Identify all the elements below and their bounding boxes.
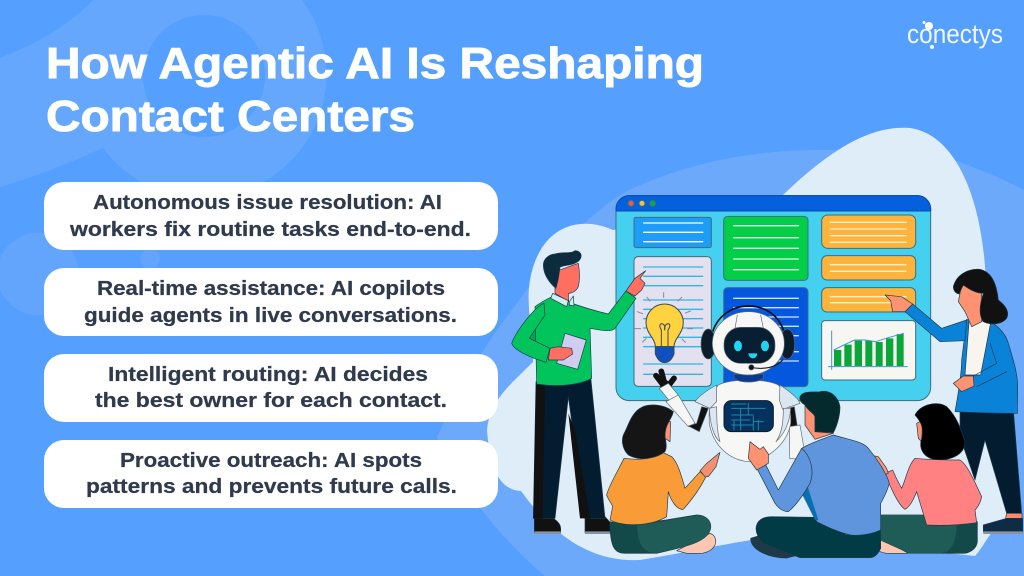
robot arms	[656, 371, 674, 386]
woman sitting in pink	[870, 404, 982, 553]
background ring and swoosh	[0, 0, 327, 315]
title: Contact Centers	[46, 92, 415, 141]
title: How Agentic AI Is Reshaping	[46, 39, 704, 88]
illustration	[512, 196, 1023, 558]
icon: light bulb	[635, 293, 693, 363]
woman standing with blue blazer	[885, 269, 1023, 534]
card: real-time assistance	[44, 268, 498, 336]
card: intelligent routing	[44, 354, 498, 422]
card: proactive outreach: Proactive outreach: AI spots	[120, 449, 422, 472]
robot body	[709, 380, 791, 462]
illustration backdrop blobs	[437, 128, 1024, 576]
card: proactive outreach	[44, 440, 498, 508]
bar chart	[828, 331, 907, 369]
card: intelligent routing: the best owner for each contact.	[95, 389, 447, 412]
card: intelligent routing: Intelligent routing: AI decides	[108, 363, 428, 386]
robot	[656, 306, 806, 462]
card: autonomous issue resolution: workers fix routine tasks end-to-end.	[69, 218, 471, 241]
card: proactive outreach: patterns and prevents future calls.	[86, 475, 457, 498]
dashboard window	[616, 196, 931, 401]
man standing with tablet	[512, 251, 646, 534]
logo: conectys: conectys	[907, 19, 1003, 49]
task cards	[44, 182, 498, 508]
card: autonomous issue resolution	[44, 182, 498, 250]
card: autonomous issue resolution: Autonomous issue resolution: AI	[93, 191, 442, 214]
man sitting in blue shirt	[748, 391, 889, 558]
card: real-time assistance: Real-time assistance: AI copilots	[97, 277, 445, 300]
title	[46, 39, 704, 141]
card: real-time assistance: guide agents in live conversations.	[84, 304, 457, 327]
woman sitting in orange	[607, 405, 720, 553]
robot head	[712, 306, 785, 335]
robot collar	[734, 374, 763, 382]
